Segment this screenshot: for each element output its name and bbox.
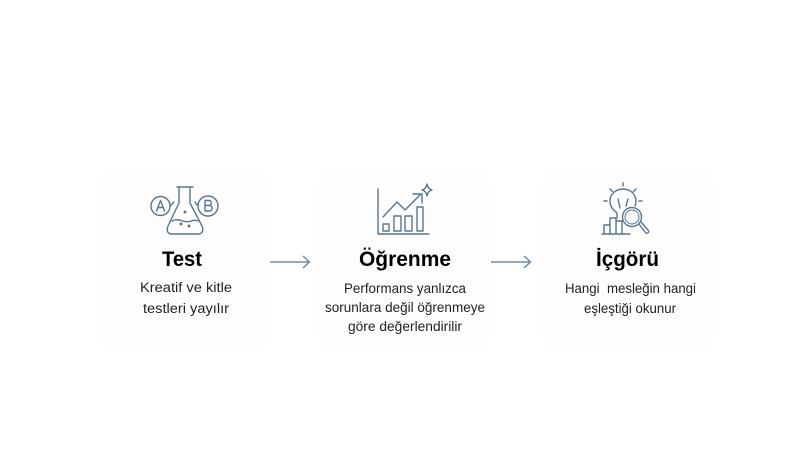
heading: Test: Test	[162, 248, 202, 271]
text: İçgörü description: Hangi mesleğin hangi	[565, 281, 696, 296]
text: Öğrenme description: göre değerlendirilir	[348, 319, 463, 334]
text: Test description: Kreatif ve kitle	[140, 280, 232, 295]
panel: Öğrenme	[318, 172, 490, 348]
text: Öğrenme description: Performans yanlızca	[344, 281, 466, 296]
icon: bulb and magnifier	[602, 183, 649, 234]
arrow: Öğrenme to İçgörü	[491, 256, 530, 268]
heading: İçgörü: İçgörü	[596, 248, 659, 271]
panel: İçgörü	[542, 172, 714, 348]
text: İçgörü description: eşleştiği okunur	[584, 301, 676, 316]
text: Öğrenme description: sorunlara değil öğrenmeye	[325, 300, 485, 315]
arrow: Test to Öğrenme	[270, 256, 310, 268]
text: Test description	[140, 280, 232, 316]
panel: Test	[96, 172, 269, 348]
text: Öğrenme description	[325, 281, 485, 334]
heading: Öğrenme: Öğrenme	[359, 248, 451, 271]
icon: A/B flask	[151, 187, 218, 234]
text: Test description: testleri yayılır	[143, 301, 230, 316]
icon: growth chart	[378, 184, 432, 234]
text: İçgörü description	[565, 281, 696, 316]
